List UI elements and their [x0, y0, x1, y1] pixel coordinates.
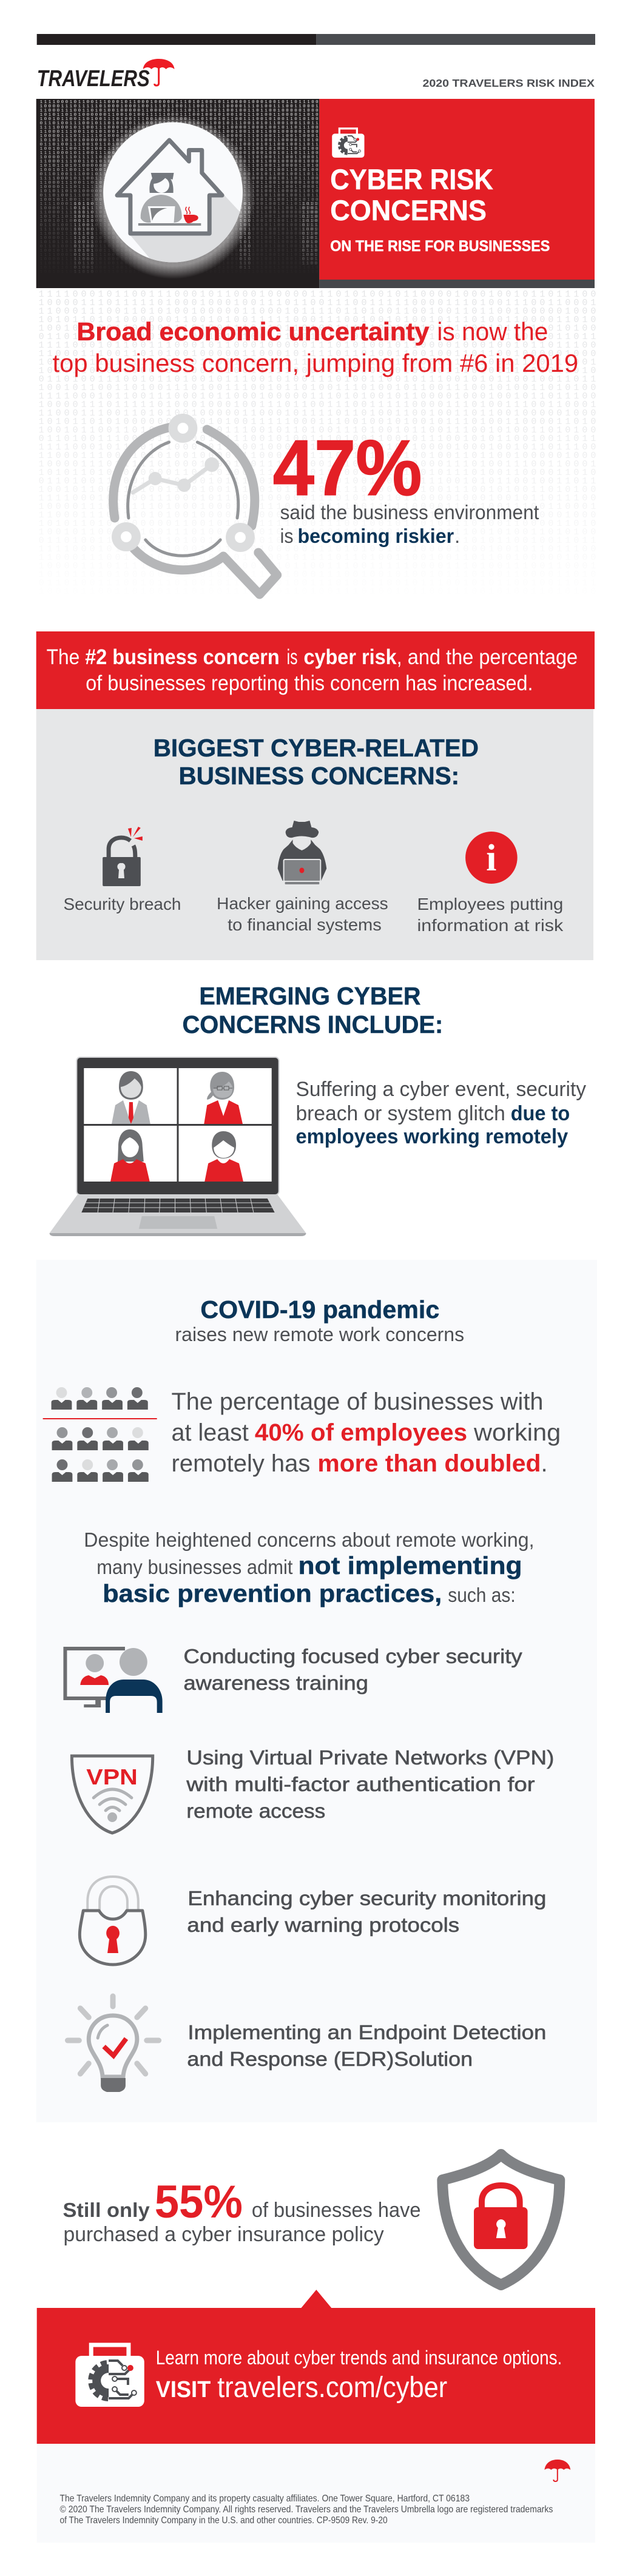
infographic page: 101011010100000011001010011111000111001001010010111010011000011010	[39, 519, 599, 529]
panel: hero: 110001110011010100100000110001011110110100110010011011001000001000	[40, 210, 320, 215]
panel: hero: 01100	[74, 244, 95, 249]
panel: hero: 11010	[74, 236, 95, 241]
panel: hero	[36, 99, 595, 288]
panel: number 2 concern banner: cyber risk	[303, 645, 397, 669]
infographic page: 100001110111110100010001001110110011100111110000111010011100110001	[39, 460, 599, 469]
practice: monitoring: and early warning protocols	[187, 1914, 459, 1936]
infographic page: 110001110011010100100000110001011110110100110010011011001000001000	[39, 409, 599, 419]
infographic page: 101011010100000011001010011111000111001001010010111010011000011010	[39, 417, 599, 427]
panel: hero: 101011010100000011001010011111000111001001010010111010011000011010	[40, 215, 320, 220]
panel: hero: 111100010110011100010110001000001110101001011000010001001011011100	[40, 126, 320, 130]
panel: footer	[37, 2444, 595, 2543]
panel: hero: 11010	[74, 270, 95, 275]
caption: hacker	[217, 894, 388, 934]
icon: VPN shield: VPN	[86, 1765, 138, 1789]
heading: emerging cyber concerns: CONCERNS INCLUDE:	[182, 1011, 443, 1038]
panel: hero: 111100010110011100010110001000001110101001011000010001001011011100	[40, 202, 320, 207]
legal text	[59, 2494, 553, 2526]
hero title: CONCERNS	[330, 195, 487, 226]
panel: number 2 concern banner: #2 business concern	[85, 645, 280, 669]
COVID heading: COVID-19 pandemic	[200, 1296, 439, 1323]
remote employees statistic: working	[473, 1419, 561, 1446]
panel: hero: 011010011100101101001011100101001110100110010111001010110010011011	[40, 121, 320, 126]
caption: hacker: Hacker gaining access	[217, 894, 388, 913]
panel: hero: 011010011100101101001011100101001110100110010111001010110010011011	[40, 193, 320, 198]
stat: 47%: 47%	[273, 425, 422, 512]
icon: magnifying glass with chart	[113, 419, 277, 594]
infographic page: 100101100110100111010011100101101001110100101100111001010011010100	[39, 383, 599, 393]
icon: information	[465, 832, 518, 884]
practice: EDR	[187, 2021, 546, 2070]
panel: hero: 011010011100101101001011100101001110100110010111001010110010011011	[40, 172, 320, 177]
person: man with tie	[112, 1071, 150, 1124]
infographic page: 011010011100101101001011100101001110100110010111001010110010011011	[39, 477, 599, 486]
panel: hero: 101	[240, 253, 252, 258]
panel: hero: 0110	[302, 249, 319, 254]
panel: hero: 100	[240, 219, 252, 224]
infographic page: 110001110011010100100000110001011110110100110010011011001000001000	[39, 511, 599, 520]
caption: employees: Employees putting	[417, 895, 563, 913]
infographic page: 101011010100000011001010011111000111001001010010111010011000011010	[39, 315, 599, 325]
practice: monitoring: Enhancing cyber security monitoring	[187, 1887, 546, 1909]
panel: hero: 110	[240, 232, 252, 237]
icon: cyber briefcase	[75, 2345, 144, 2407]
infographic page: 100101100110100111010011100101101001110100101100111001010011010100	[39, 324, 599, 334]
panel: number 2 concern banner: is	[287, 645, 298, 669]
caption: hacker: to financial systems	[228, 915, 382, 934]
heading: emerging cyber concerns: EMERGING CYBER	[199, 982, 420, 1010]
COVID heading	[175, 1296, 464, 1345]
caption: security breach: Security breach	[63, 895, 181, 913]
panel: hero: 110	[240, 244, 252, 249]
panel: hero: 0101	[302, 206, 319, 211]
panel: hero: 01101	[74, 232, 95, 237]
remote employees statistic	[172, 1388, 561, 1477]
stat caption	[280, 501, 539, 547]
panel: hero: 010	[240, 257, 252, 262]
panel: hero: 001	[240, 249, 252, 254]
panel heading: BUSINESS CONCERNS:	[178, 762, 459, 790]
hero title: ON THE RISE FOR BUSINESSES	[330, 238, 550, 255]
panel: hero: 1010	[302, 219, 319, 224]
panel: hero: 011010011100101101001011100101001110100110010111001010110010011011	[40, 143, 320, 147]
prevention practices intro: Despite heightened concerns about remote working,	[84, 1528, 535, 1551]
icon: monitoring padlock	[79, 1877, 146, 1965]
panel: hero: 100001110111110100010001001110110011100111110000111010011100110001	[40, 104, 320, 109]
COVID heading: raises new remote work concerns	[175, 1323, 464, 1345]
panel: hero: 100001110111110100010001001110110011100111110000111010011100110001	[40, 236, 320, 241]
infographic page: 011010011100101101001011100101001110100110010111001010110010011011	[39, 375, 599, 385]
call to action text: Learn more about cyber trends and insurance options.	[156, 2347, 562, 2369]
cyber insurance statistic	[62, 2176, 420, 2246]
panel: hero: 00110	[74, 219, 95, 224]
icon: grid of employees	[43, 1387, 157, 1482]
prevention practices intro: not implementing	[298, 1552, 522, 1579]
panel: hero: 11000	[74, 257, 95, 262]
panel: hero: 110	[240, 210, 252, 215]
hero title	[330, 164, 550, 255]
panel: hero: 100001110111110100010001001110110011100111110000111010011100110001	[40, 185, 320, 190]
panel: hero: 111100010110011100010110001000001110101001011000010001001011011100	[40, 227, 320, 232]
panel: hero: 110001110011010100100000110001011110110100110010011011001000001000	[40, 130, 320, 135]
panel: hero: 111100010110011100010110001000001110101001011000010001001011011100	[40, 100, 320, 105]
panel: hero: 101011010100000011001010011111000111001001010010111010011000011010	[40, 164, 320, 169]
infographic page: 100001110111110100010001001110110011100111110000111010011100110001	[39, 400, 599, 410]
headline: Broad economic uncertainty	[76, 317, 430, 346]
emerging concern text: employees working remotely	[296, 1125, 568, 1148]
infographic page: 111100010110011100010110001000001110101001011000010001001011011100	[39, 443, 599, 452]
panel: hero: 100101100110100111010011100101101001110100101100111001010011010100	[40, 147, 320, 152]
panel: hero: 100101100110100111010011100101101001110100101100111001010011010100	[40, 270, 320, 275]
infographic page: 011010011100101101001011100101001110100110010111001010110010011011	[39, 536, 599, 546]
emerging concern text	[296, 1078, 586, 1148]
infographic page: 111100010110011100010110001000001110101001011000010001001011011100	[39, 341, 599, 351]
person: woman with long hair	[110, 1129, 150, 1182]
remote employees statistic: remotely has	[172, 1450, 310, 1477]
panel: hero: 100101100110100111010011100101101001110100101100111001010011010100	[40, 117, 320, 122]
panel: hero: 101	[240, 223, 252, 228]
panel: biggest cyber-related concerns	[36, 709, 593, 960]
infographic page: 011010011100101101001011100101001110100110010111001010110010011011	[39, 434, 599, 444]
person: woman with short hair	[204, 1131, 243, 1182]
infographic page: 011010011100101101001011100101001110100110010111001010110010011011	[39, 579, 599, 588]
practice: EDR: Implementing an Endpoint Detection	[187, 2021, 546, 2043]
panel: hero: 10110	[74, 202, 95, 207]
practice: VPN: with multi-factor authentication for	[186, 1773, 535, 1795]
panel: hero: 10110	[74, 261, 95, 266]
panel: hero: 111100010110011100010110001000001110101001011000010001001011011100	[40, 151, 320, 156]
icon: VPN shield	[72, 1756, 153, 1833]
panel: hero: 0110	[302, 232, 319, 237]
panel: number 2 concern banner: The	[47, 645, 79, 669]
panel: hero: 0010	[302, 240, 319, 245]
panel: hero: 1100	[302, 210, 319, 215]
icon: shield with padlock	[442, 2154, 559, 2285]
caption: employees	[417, 895, 563, 935]
panel: COVID-19 remote work	[36, 1260, 597, 2122]
call to action text	[156, 2347, 562, 2404]
remote employees statistic: .	[541, 1450, 548, 1477]
panel: hero: 11010	[74, 210, 95, 215]
panel: hero: 011	[240, 266, 252, 271]
Travelers logo: TRAVELERS	[37, 66, 150, 92]
panel: hero: 100101100110100111010011100101101001110100101100111001010011010100	[40, 168, 320, 173]
prevention practices intro: many businesses admit	[96, 1556, 293, 1578]
panel: call to action	[37, 2290, 595, 2444]
stat caption: is	[280, 525, 294, 547]
panel: hero: 10101	[74, 249, 95, 254]
panel: hero: 101	[240, 202, 252, 207]
icon: light bulb with check	[67, 1996, 159, 2092]
panel: hero: 010	[240, 206, 252, 211]
infographic page: 011010011100101101001011100101001110100110010111001010110010011011	[39, 332, 599, 342]
legal text: of The Travelers Indemnity Company in the U.S. and other countries. CP-9509 Rev. 9-20	[59, 2515, 388, 2526]
panel: number 2 concern banner: of businesses reporting this concern has increased.	[86, 671, 533, 695]
top bar	[37, 34, 595, 45]
legal text: © 2020 The Travelers Indemnity Company. All rights reserved. Travelers and the Travelers Umbrella logo are registered trademarks	[59, 2504, 553, 2515]
prevention practices intro: such as:	[448, 1584, 516, 1606]
stat caption: said the business environment	[280, 501, 539, 523]
panel: hero: 101011010100000011001010011111000111001001010010111010011000011010	[40, 189, 320, 194]
cyber insurance statistic: Still only	[62, 2199, 150, 2221]
infographic page: 100101100110100111010011100101101001110100101100111001010011010100	[39, 485, 599, 495]
panel: hero: 110001110011010100100000110001011110110100110010011011001000001000	[40, 181, 320, 186]
panel: hero: 10100	[74, 227, 95, 232]
cyber insurance statistic: purchased a cyber insurance policy	[63, 2223, 384, 2246]
panel: hero: 1011	[302, 202, 319, 207]
practice: awareness training: awareness training	[183, 1672, 368, 1694]
emerging concern text: due to	[511, 1102, 570, 1125]
caption: employees: information at risk	[417, 916, 563, 935]
panel: hero: 100001110111110100010001001110110011100111110000111010011100110001	[40, 155, 320, 160]
infographic page: 110001110011010100100000110001011110110100110010011011001000001000	[39, 553, 599, 563]
panel: hero: 01011	[74, 253, 95, 258]
infographic page: 100101100110100111010011100101101001110100101100111001010011010100	[39, 587, 599, 597]
practice: VPN: remote access	[186, 1800, 325, 1822]
panel: hero: 100001110111110100010001001110110011100111110000111010011100110001	[40, 257, 320, 262]
stat caption: .	[454, 525, 460, 547]
icon: remote worker in house	[92, 115, 254, 279]
icon: information: i	[486, 838, 496, 879]
panel: hero: 01011	[74, 206, 95, 211]
call to action text: travelers.com/cyber	[217, 2372, 447, 2404]
practice: VPN: Using Virtual Private Networks (VPN)	[186, 1746, 554, 1769]
call to action text: VISIT	[156, 2377, 211, 2403]
infographic page: 110001110011010100100000110001011110110100110010011011001000001000	[39, 451, 599, 461]
panel: hero: 110001110011010100100000110001011110110100110010011011001000001000	[40, 261, 320, 266]
icon: hacker	[278, 821, 326, 884]
practice: monitoring	[187, 1887, 546, 1936]
remote employees statistic: The percentage of businesses with	[172, 1388, 543, 1415]
panel: hero: 010	[240, 236, 252, 241]
panel: hero: 1001	[302, 227, 319, 232]
headline	[53, 317, 578, 377]
infographic page: 101011010100000011001010011111000111001001010010111010011000011010	[39, 366, 599, 376]
panel: hero: 10011	[74, 240, 95, 245]
infographic page: 110001110011010100100000110001011110110100110010011011001000001000	[39, 307, 599, 317]
panel: hero: 110001110011010100100000110001011110110100110010011011001000001000	[40, 109, 320, 113]
remote employees statistic: at least	[172, 1419, 249, 1446]
panel heading	[154, 734, 479, 790]
infographic page: 110001110011010100100000110001011110110100110010011011001000001000	[39, 349, 599, 359]
practice: VPN	[186, 1746, 554, 1822]
panel: hero: 1011	[302, 244, 319, 249]
panel: hero: 011010011100101101001011100101001110100110010111001010110010011011	[40, 223, 320, 228]
panel: hero: 100001110111110100010001001110110011100111110000111010011100110001	[40, 134, 320, 139]
cyber insurance statistic: of businesses have	[252, 2199, 420, 2222]
panel: hero: 110	[240, 261, 252, 266]
panel: hero: 110001110011010100100000110001011110110100110010011011001000001000	[40, 160, 320, 164]
remote employees statistic: more than doubled	[317, 1450, 541, 1477]
panel: hero: 101	[240, 240, 252, 245]
panel: hero: 1100	[302, 261, 319, 266]
prevention practices intro	[84, 1528, 535, 1607]
headline: top business concern, jumping from #6 in 2019	[53, 349, 578, 377]
stat caption: becoming riskier	[298, 525, 454, 547]
heading: emerging cyber concerns	[182, 982, 443, 1038]
icon: broken padlock	[103, 827, 143, 886]
panel: hero: 0111	[302, 223, 319, 228]
panel: hero: 1001	[302, 253, 319, 258]
icon: umbrella	[544, 2460, 570, 2481]
panel: hero: 0110	[302, 215, 319, 220]
remote employees statistic: 40% of employees	[255, 1419, 467, 1446]
panel heading: BIGGEST CYBER-RELATED	[154, 734, 479, 762]
infographic page: 100001110111110100010001001110110011100111110000111010011100110001	[39, 562, 599, 571]
infographic page: 100001110111110100010001001110110011100111110000111010011100110001	[39, 358, 599, 368]
panel: hero: 0101	[302, 257, 319, 262]
panel: hero: 110001110011010100100000110001011110110100110010011011001000001000	[40, 232, 320, 237]
practice: awareness training: Conducting focused cyber security	[183, 1645, 522, 1667]
panel: hero: 101011010100000011001010011111000111001001010010111010011000011010	[40, 138, 320, 143]
practice: EDR: and Response (EDR)Solution	[187, 2048, 473, 2070]
panel: hero: 111100010110011100010110001000001110101001011000010001001011011100	[40, 253, 320, 258]
emerging concern text: breach or system glitch	[296, 1102, 505, 1125]
panel: hero: 011	[240, 227, 252, 232]
prevention practices intro: basic prevention practices,	[103, 1579, 442, 1607]
panel: hero: 01001	[74, 266, 95, 271]
icon: laptop with video call	[50, 1057, 306, 1236]
panel: hero: 011	[240, 215, 252, 220]
infographic page: 111100010110011100010110001000001110101001011000010001001011011100	[39, 392, 599, 402]
panel: hero: 100101100110100111010011100101101001110100101100111001010011010100	[40, 219, 320, 224]
headline: is now the	[437, 317, 548, 346]
panel: hero: 11001	[74, 223, 95, 228]
person: woman with glasses	[204, 1072, 243, 1124]
panel: hero: 111100010110011100010110001000001110101001011000010001001011011100	[40, 177, 320, 181]
panel: hero: 1101	[302, 236, 319, 241]
legal text: The Travelers Indemnity Company and its property casualty affiliates. One Tower Square, Hartford, CT 06183	[59, 2494, 470, 2504]
infographic page: 100101100110100111010011100101101001110100101100111001010011010100	[39, 528, 599, 537]
infographic page: 111100010110011100010110001000001110101001011000010001001011011100	[39, 494, 599, 503]
panel: number 2 concern banner	[36, 631, 595, 709]
panel: number 2 concern banner: , and the percentage	[397, 645, 578, 669]
panel: hero: 10011	[74, 215, 95, 220]
practice: awareness training	[183, 1645, 522, 1694]
panel: hero: 101011010100000011001010011111000111001001010010111010011000011010	[40, 113, 320, 118]
emerging concern text: Suffering a cyber event, security	[296, 1078, 586, 1101]
infographic page: 101011010100000011001010011111000111001001010010111010011000011010	[39, 570, 599, 580]
cyber insurance statistic: 55%	[155, 2176, 243, 2228]
panel: hero: 101011010100000011001010011111000111001001010010111010011000011010	[40, 240, 320, 245]
infographic page: 111100010110011100010110001000001110101001011000010001001011011100	[39, 545, 599, 554]
report name: 2020 TRAVELERS RISK INDEX	[422, 77, 595, 89]
panel: hero: 100101100110100111010011100101101001110100101100111001010011010100	[40, 198, 320, 203]
infographic page: 100001110111110100010001001110110011100111110000111010011100110001	[39, 298, 599, 308]
panel: hero: 101011010100000011001010011111000111001001010010111010011000011010	[40, 266, 320, 271]
infographic page: 100101100110100111010011100101101001110100101100111001010011010100	[39, 426, 599, 435]
icon: cyber briefcase	[332, 129, 365, 158]
hero title: CYBER RISK	[330, 164, 493, 195]
infographic page: 101011010100000011001010011111000111001001010010111010011000011010	[39, 468, 599, 478]
infographic page: 111100010110011100010110001000001110101001011000010001001011011100	[39, 290, 599, 300]
infographic page: 100001110111110100010001001110110011100111110000111010011100110001	[39, 502, 599, 512]
panel: hero: 011010011100101101001011100101001110100110010111001010110010011011	[40, 244, 320, 249]
panel: hero: 100001110111110100010001001110110011100111110000111010011100110001	[40, 206, 320, 211]
icon: video training	[65, 1648, 163, 1713]
panel: hero: 100101100110100111010011100101101001110100101100111001010011010100	[40, 249, 320, 254]
